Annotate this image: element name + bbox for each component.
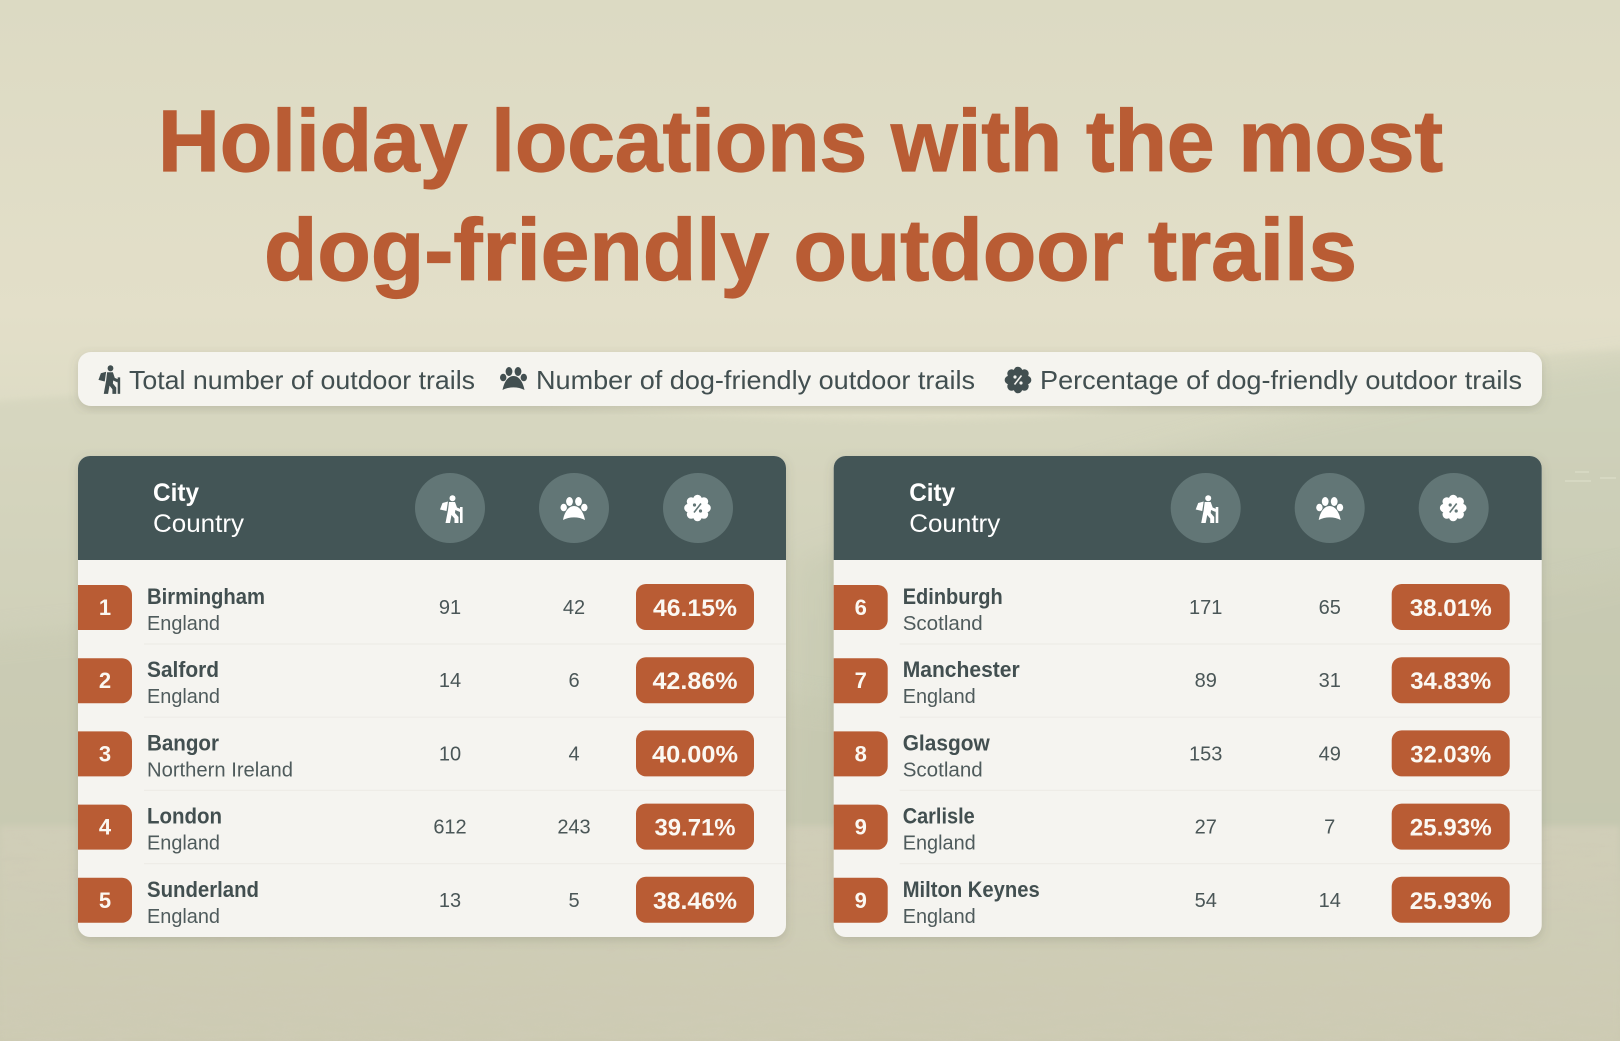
row: Carlisle: 25.93% (1410, 815, 1492, 842)
row: London (78, 804, 754, 855)
row: Bangor: 4 (568, 743, 580, 765)
row: Milton Keynes: 54 (1195, 890, 1217, 912)
row: Milton Keynes: 9 (855, 888, 867, 913)
table header: City (909, 479, 955, 507)
row: Milton Keynes (834, 877, 1510, 928)
legend item: percentage: Percentage of dog-friendly outdoor trails (1040, 365, 1522, 395)
row: Bangor: Northern Ireland (147, 759, 293, 781)
row: Edinburgh: 6 (855, 595, 867, 620)
row: Carlisle: Carlisle (903, 804, 975, 829)
row: Bangor (78, 730, 754, 781)
row: Glasgow: 8 (855, 741, 867, 766)
row: Salford: 42.86% (652, 668, 738, 695)
row: Edinburgh: 171 (1189, 597, 1222, 619)
row: Manchester: England (903, 686, 976, 708)
title: Holiday locations with the most (158, 93, 1443, 190)
row: Birmingham (78, 584, 754, 635)
row: London: 4 (99, 815, 112, 840)
row: Milton Keynes: 25.93% (1410, 888, 1492, 915)
row: Salford: 2 (99, 668, 111, 693)
row: London: 243 (557, 817, 591, 839)
row: Glasgow (834, 730, 1510, 781)
table header (834, 456, 1542, 560)
row: Salford (78, 657, 754, 708)
row: Edinburgh (834, 584, 1510, 635)
panel: ranks 6 to 9 (834, 456, 1542, 937)
row: Manchester: 31 (1319, 670, 1341, 692)
table header: Country (909, 510, 1001, 538)
title (158, 93, 1443, 299)
table header: City (153, 479, 199, 507)
row: Birmingham: England (147, 613, 220, 635)
row: Sunderland: Sunderland (147, 877, 259, 902)
row: Milton Keynes: Milton Keynes (903, 877, 1040, 902)
legend item: total trails: Total number of outdoor trails (129, 365, 475, 395)
row: Carlisle (834, 804, 1510, 855)
row: Bangor: 3 (99, 741, 111, 766)
row: Glasgow: 153 (1189, 743, 1222, 765)
row: Birmingham: 46.15% (653, 595, 737, 622)
row: Birmingham: 91 (439, 597, 461, 619)
row: Carlisle: 7 (1324, 817, 1335, 839)
row: Edinburgh: 65 (1319, 597, 1341, 619)
row: Bangor: 40.00% (652, 741, 738, 768)
legend bar (78, 352, 1542, 406)
row: London: 612 (433, 817, 467, 839)
row: Birmingham: 1 (99, 595, 111, 620)
row: Edinburgh: 38.01% (1410, 595, 1492, 622)
row: Manchester (834, 657, 1510, 708)
row: Carlisle: 9 (855, 815, 867, 840)
row: Sunderland: 5 (99, 888, 111, 913)
row: Salford: Salford (147, 657, 219, 682)
row: Salford: 14 (439, 670, 461, 692)
table header (78, 456, 786, 560)
row: Manchester: 7 (855, 668, 867, 693)
row: Manchester: 34.83% (1410, 668, 1491, 695)
row: Sunderland: 5 (568, 890, 580, 912)
row: Carlisle: England (903, 833, 976, 855)
row: Birmingham: 42 (563, 597, 585, 619)
title: dog-friendly outdoor trails (264, 202, 1357, 299)
row: London: England (147, 833, 220, 855)
row: Sunderland: England (147, 906, 220, 928)
row: Milton Keynes: 14 (1319, 890, 1341, 912)
row: Birmingham: Birmingham (147, 584, 265, 609)
row: Glasgow: Scotland (903, 759, 983, 781)
row: Glasgow: 32.03% (1410, 741, 1491, 768)
table header: Country (153, 510, 245, 538)
row: Edinburgh: Edinburgh (903, 584, 1003, 609)
row: Edinburgh: Scotland (903, 613, 983, 635)
legend item: dog-friendly trails: Number of dog-friendly outdoor trails (536, 365, 975, 395)
row: Carlisle: 27 (1195, 817, 1217, 839)
row: London: 39.71% (654, 815, 736, 842)
row: Sunderland (78, 877, 754, 928)
row: Glasgow: Glasgow (903, 730, 991, 755)
panel: ranks 1 to 5 (78, 456, 786, 937)
row: Salford: 6 (568, 670, 580, 692)
row: Sunderland: 38.46% (653, 888, 737, 915)
row: Bangor: Bangor (147, 730, 219, 755)
row: Salford: England (147, 686, 220, 708)
row: Glasgow: 49 (1319, 743, 1341, 765)
row: Milton Keynes: England (903, 906, 976, 928)
row: Manchester: 89 (1195, 670, 1217, 692)
row: Bangor: 10 (439, 743, 461, 765)
row: Sunderland: 13 (439, 890, 461, 912)
row: London: London (147, 804, 222, 829)
row: Manchester: Manchester (903, 657, 1020, 682)
